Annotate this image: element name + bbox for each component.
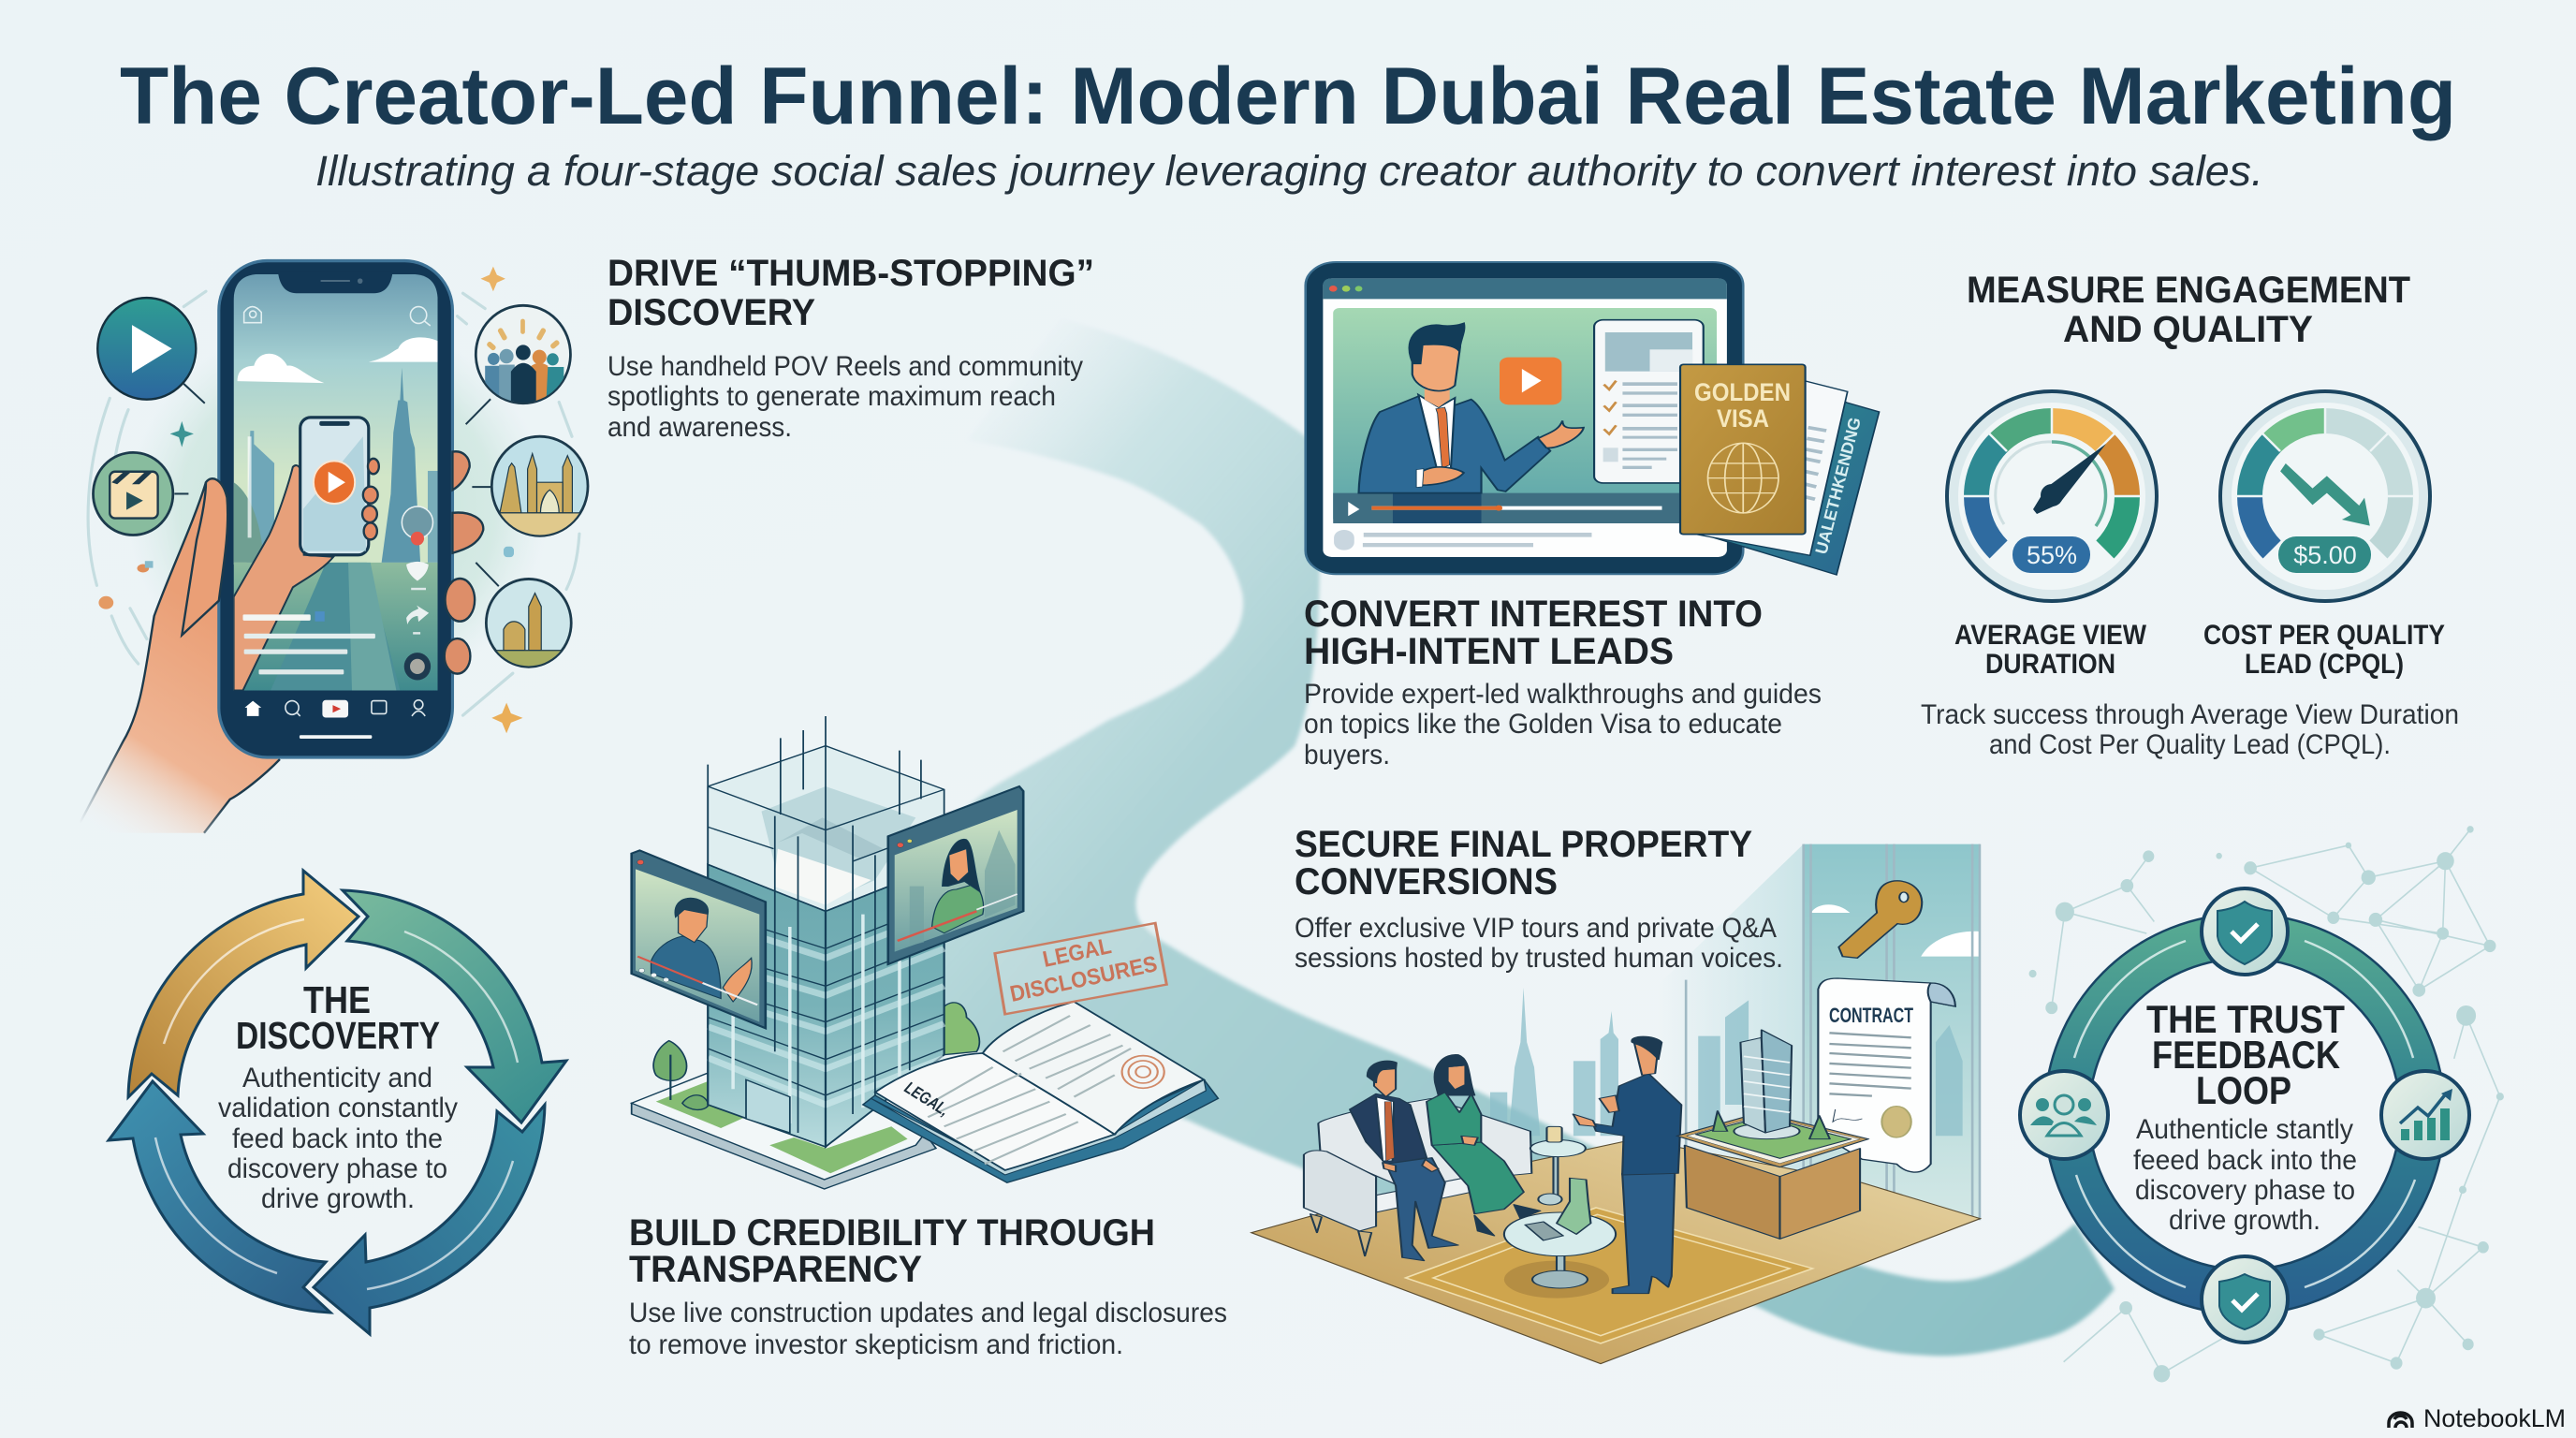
body: convert: Provide expert-led walkthroughs and guides xyxy=(1304,679,1822,710)
gauge: average view duration xyxy=(1947,391,2157,601)
body: build: to remove investor skepticism and friction. xyxy=(629,1329,1123,1360)
hand palm xyxy=(75,478,280,833)
icon: play bubble xyxy=(97,298,205,404)
heading: build: BUILD CREDIBILITY THROUGH xyxy=(629,1212,1155,1254)
gauge labels: LEAD (CPQL) xyxy=(2245,649,2404,680)
gauge labels: COST PER QUALITY xyxy=(2203,620,2445,651)
icon: VIP lounge scene with contract and key: CONTRACT xyxy=(1829,1004,1913,1027)
gauge labels: DURATION xyxy=(1985,649,2115,680)
inner small phone xyxy=(300,418,369,555)
icon: glass tower with screens and legal book: LEGAL, xyxy=(901,1078,953,1120)
icon: tablet with expert video and golden visa: UALETHKENDNG xyxy=(1811,416,1865,556)
open book xyxy=(863,1002,1218,1182)
gauge: average view duration: 55% xyxy=(2027,541,2077,569)
icon: VIP lounge scene with contract and key xyxy=(1251,844,1980,1364)
text: trust feedback loop: feeed back into the xyxy=(2133,1145,2357,1176)
tower upper glass xyxy=(708,746,944,911)
phone screen scene xyxy=(234,274,438,691)
document card xyxy=(1594,320,1704,483)
body: secure: Offer exclusive VIP tours and private Q&A xyxy=(1295,913,1777,944)
text: the discovery circle: THE xyxy=(303,978,371,1021)
icon: tablet with expert video and golden visa: GOLDEN xyxy=(1694,378,1791,406)
text: trust feedback loop: discovery phase to xyxy=(2135,1175,2355,1206)
text: trust feedback loop: LOOP xyxy=(2196,1068,2291,1112)
body: secure xyxy=(1295,913,1783,974)
heading: measure: MEASURE ENGAGEMENT xyxy=(1967,270,2410,311)
panel: convert interest xyxy=(1304,594,1822,770)
screen: woman xyxy=(888,786,1023,964)
text: the discovery circle xyxy=(218,978,458,1214)
paper sheet xyxy=(1692,381,1848,555)
icon: glass tower with screens and legal book: LEGAL xyxy=(1041,933,1114,973)
heading: build xyxy=(629,1212,1155,1290)
gauge: cost per quality lead: $5.00 xyxy=(2293,541,2357,569)
icon: community bubble xyxy=(466,305,570,424)
body: measure: and Cost Per Quality Lead (CPQL). xyxy=(1989,729,2391,760)
gauge labels: AVERAGE VIEW xyxy=(1954,620,2147,651)
icon: hand holding phone with reels screen and orbiting icons xyxy=(75,261,593,833)
play button orange xyxy=(314,461,355,504)
heading: discovery xyxy=(607,253,1094,333)
heading: convert: HIGH-INTENT LEADS xyxy=(1304,631,1674,672)
armchair sofa xyxy=(1304,1098,1531,1256)
heading: secure: SECURE FINAL PROPERTY xyxy=(1295,824,1752,865)
text: trust feedback loop: drive growth. xyxy=(2169,1205,2320,1236)
heading: build: TRANSPARENCY xyxy=(629,1249,922,1290)
text: trust feedback loop: Authenticle stantly xyxy=(2136,1114,2353,1145)
base plate xyxy=(632,1103,936,1189)
panel: drive discovery xyxy=(607,253,1094,443)
body: discovery: spotlights to generate maximum reach xyxy=(607,381,1056,412)
window view and skyline xyxy=(1490,844,1980,1220)
panel: secure final conversions xyxy=(1295,824,1783,974)
heading: convert xyxy=(1304,594,1763,672)
icon: glass tower with screens and legal book: DISCLOSURES xyxy=(1008,951,1160,1007)
top bar icons xyxy=(244,307,431,326)
body: discovery xyxy=(607,351,1083,443)
seated man xyxy=(1350,1061,1458,1261)
heading: convert: CONVERT INTEREST INTO xyxy=(1304,594,1763,635)
node: people xyxy=(2020,1071,2108,1159)
golden visa passport xyxy=(1680,364,1806,535)
text: trust feedback loop: FEEDBACK xyxy=(2152,1033,2340,1077)
phone body xyxy=(219,261,452,757)
side table with bottle xyxy=(1530,1126,1586,1205)
video play button xyxy=(1500,358,1561,404)
body: build: Use live construction updates and legal disclosures xyxy=(629,1298,1227,1328)
text: trust feedback loop xyxy=(2133,997,2357,1236)
icon: tower bubble xyxy=(476,563,574,669)
icon: circular discovery arrows xyxy=(109,871,566,1334)
NotebookLM logo: NotebookLM xyxy=(2423,1404,2566,1432)
text: the discovery circle: DISCOVERTY xyxy=(236,1014,440,1057)
body: measure xyxy=(1921,699,2459,760)
text: the discovery circle: discovery phase to xyxy=(227,1153,447,1184)
body: discovery: Use handheld POV Reels and community xyxy=(607,351,1083,382)
title: The Creator-Led Funnel: Modern Dubai Real Estate Marketing xyxy=(120,51,2456,141)
text: the discovery circle: drive growth. xyxy=(261,1183,415,1214)
notch xyxy=(278,272,392,293)
floor and rug xyxy=(1251,1139,1980,1364)
podium with building model xyxy=(1676,1030,1868,1239)
panel: build credibility xyxy=(629,1212,1227,1360)
heading: measure xyxy=(1967,270,2410,350)
overlay ui xyxy=(402,506,433,538)
flowing ribbon connecting the stages xyxy=(889,318,2115,1356)
icon: landmark arch bubble xyxy=(472,436,593,539)
heading: secure xyxy=(1295,824,1752,902)
heading: discovery: DISCOVERY xyxy=(607,292,815,333)
screen: presenter man xyxy=(632,850,766,1028)
subtitle: Illustrating a four-stage social sales journey leveraging creator authority to convert interest into sales. xyxy=(315,147,2263,195)
inner hand xyxy=(234,465,333,691)
low table xyxy=(1504,1178,1616,1288)
gauge: cost per quality lead xyxy=(2220,391,2430,601)
tower lower xyxy=(708,864,826,1147)
icon: glass tower with screens and legal book xyxy=(632,716,1218,1189)
legal stamp border xyxy=(995,923,1166,1014)
text: the discovery circle: feed back into the xyxy=(232,1123,443,1154)
presenter figure xyxy=(1359,323,1584,493)
contract scroll and key xyxy=(1818,881,1955,1172)
heading: discovery: DRIVE “THUMB-STOPPING” xyxy=(607,253,1094,294)
seated woman xyxy=(1427,1054,1540,1236)
icon: tablet with expert video and golden visa xyxy=(1306,262,1880,575)
text: trust feedback loop: THE TRUST xyxy=(2146,997,2345,1041)
icon: clapperboard bubble xyxy=(94,452,188,536)
gauge labels xyxy=(1954,620,2445,680)
fingers gripping phone xyxy=(445,451,483,674)
bottom nav icons xyxy=(244,700,425,739)
text: the discovery circle: Authenticity and xyxy=(242,1063,432,1093)
trust feedback loop ring xyxy=(2020,888,2469,1343)
body: convert xyxy=(1304,679,1822,770)
teal booklet xyxy=(1701,384,1880,575)
floor bands xyxy=(708,911,944,1105)
standing host xyxy=(1573,1036,1681,1294)
body: discovery: and awareness. xyxy=(607,412,792,443)
furniture and figures xyxy=(1304,1030,1868,1294)
node: growth chart xyxy=(2381,1071,2469,1159)
heading: secure: CONVERSIONS xyxy=(1295,861,1558,902)
body: convert: on topics like the Golden Visa to educate xyxy=(1304,709,1782,740)
decorative sparkles xyxy=(98,267,522,733)
text: the discovery circle: validation constantly xyxy=(218,1093,458,1123)
trees xyxy=(653,1041,686,1080)
thumb xyxy=(182,478,227,635)
body: convert: buyers. xyxy=(1304,740,1390,770)
network background xyxy=(2029,826,2504,1382)
node: shield bottom xyxy=(2202,1256,2288,1343)
body: measure: Track success through Average View Duration xyxy=(1921,699,2459,730)
panel: measure engagement xyxy=(1921,270,2459,760)
body: secure: sessions hosted by trusted human voices. xyxy=(1295,943,1783,974)
heading: measure: AND QUALITY xyxy=(2063,309,2313,350)
icon: tablet with expert video and golden visa: VISA xyxy=(1717,404,1769,433)
node: shield top xyxy=(2202,888,2288,975)
body: build xyxy=(629,1298,1227,1360)
